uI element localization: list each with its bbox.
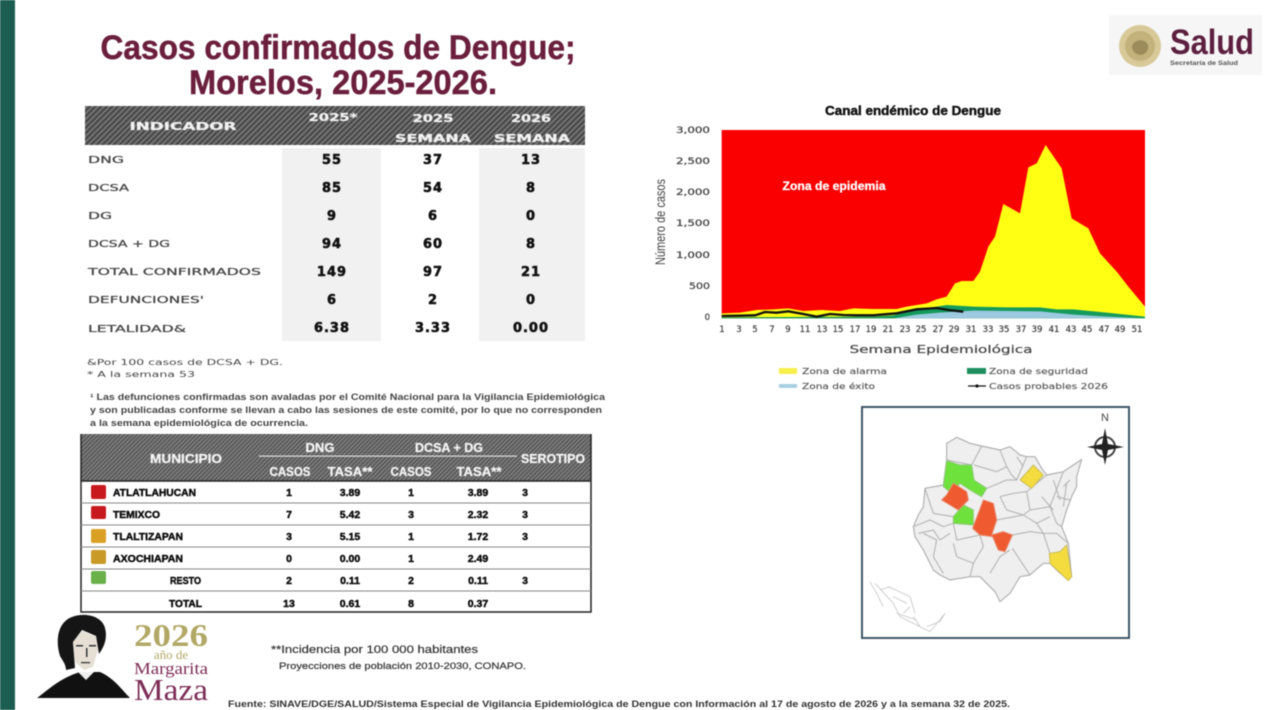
municipality values: 2.49 bbox=[468, 553, 488, 565]
row values: 6 bbox=[428, 209, 438, 224]
y axis title: Número de casos bbox=[652, 179, 668, 265]
row values: 8 bbox=[526, 237, 536, 252]
table header: 2025 bbox=[412, 112, 454, 125]
table frame and row rules bbox=[81, 434, 591, 612]
y axis labels: 3,000 bbox=[676, 126, 710, 136]
commemorative text: 2026 año de Margarita Maza: Maza bbox=[134, 672, 208, 707]
incidence note bbox=[271, 644, 526, 672]
row labels: DNG bbox=[88, 155, 124, 166]
x axis labels: 47 bbox=[1099, 325, 1109, 335]
municipality values: 0.11 bbox=[340, 575, 360, 587]
row values: 21 bbox=[521, 265, 541, 280]
row values: 6 bbox=[327, 293, 337, 308]
chart title: Canal endémico de Dengue bbox=[825, 103, 1001, 118]
source line: Fuente: SINAVE/DGE/SALUD/Sistema Especial de Vigilancia Epidemiológica de Dengue con Información al 17 de agosto de 2026 y a la semana 32 de 2025. bbox=[228, 699, 1010, 709]
zone label: Zona de epidemia bbox=[782, 179, 886, 193]
chart legend bbox=[779, 367, 1108, 391]
chart legend: Zona de seguridad bbox=[989, 367, 1088, 376]
plot areas bbox=[722, 130, 1145, 318]
footnotes for indicator table: * A la semana 53 bbox=[87, 370, 195, 379]
portrait: Margarita Maza bbox=[37, 615, 130, 698]
y axis labels: 2,000 bbox=[676, 188, 710, 198]
x axis labels: 49 bbox=[1115, 325, 1125, 335]
x axis labels: 41 bbox=[1049, 325, 1059, 335]
municipality values: 3.89 bbox=[340, 487, 360, 499]
title bbox=[100, 29, 576, 102]
row values: 6.38 bbox=[314, 321, 350, 336]
note on confirmed deaths: y son publicadas conforme se llevan a cabo las sesiones de este comité, por lo que no corresponden bbox=[90, 405, 602, 415]
x axis labels: 9 bbox=[785, 325, 791, 335]
municipality values: 3 bbox=[522, 509, 528, 521]
left green edge band bbox=[0, 0, 15, 710]
municipality values: 8 bbox=[408, 598, 414, 610]
row values: 94 bbox=[322, 237, 342, 252]
municipal table header bbox=[81, 434, 591, 481]
logo: Salud: Salud bbox=[1170, 23, 1254, 62]
footnotes for indicator table: &Por 100 casos de DCSA + DG. bbox=[87, 358, 283, 367]
commemorative text: 2026 año de Margarita Maza bbox=[134, 617, 208, 707]
row values: 2 bbox=[428, 293, 438, 308]
municipal table header: CASOS bbox=[390, 464, 432, 479]
row labels: DCSA + DG bbox=[88, 239, 170, 250]
municipality values: 0.61 bbox=[340, 598, 360, 610]
x axis labels: 45 bbox=[1082, 325, 1092, 335]
chart: canal endémico bbox=[652, 103, 1145, 391]
row values: 85 bbox=[322, 181, 342, 196]
x axis labels: 13 bbox=[817, 325, 827, 335]
x axis labels: 19 bbox=[866, 325, 876, 335]
logo: Salud: Secretaría de Salud bbox=[1170, 61, 1238, 67]
table: indicadores bbox=[85, 106, 585, 341]
municipality values: 0.37 bbox=[468, 598, 488, 610]
incidence note: Proyecciones de población 2010-2030, CONAPO. bbox=[279, 661, 526, 672]
x axis labels: 43 bbox=[1066, 325, 1076, 335]
municipality values: 3 bbox=[286, 531, 292, 543]
municipality values: 0 bbox=[286, 553, 292, 565]
chart legend: Zona de alarma bbox=[802, 367, 887, 376]
municipality names: TEMIXCO bbox=[113, 509, 160, 521]
municipal table header: DNG bbox=[306, 440, 334, 455]
municipal borders bbox=[913, 446, 1070, 577]
x axis labels: 23 bbox=[900, 325, 910, 335]
municipality values bbox=[283, 487, 528, 610]
municipality values: 3.89 bbox=[468, 487, 488, 499]
green municipalities bbox=[943, 461, 987, 525]
municipality values: 2.32 bbox=[468, 509, 488, 521]
x axis title: Semana Epidemiológica bbox=[850, 343, 1032, 356]
row values: 0 bbox=[526, 209, 536, 224]
note on confirmed deaths: ¹ Las defunciones confirmadas son avaladas por el Comité Nacional para la Vigilancia Epidemiológica bbox=[90, 392, 606, 402]
status icons bbox=[91, 485, 106, 584]
x axis labels: 21 bbox=[883, 325, 893, 335]
table header: 2026 bbox=[511, 112, 551, 125]
commemorative text: 2026 año de Margarita Maza: año de bbox=[154, 647, 188, 662]
municipality values: 7 bbox=[286, 509, 292, 521]
shaded columns bbox=[282, 148, 585, 341]
municipality names: AXOCHIAPAN bbox=[113, 553, 183, 565]
municipality values: 13 bbox=[283, 598, 295, 610]
municipality values: 0.11 bbox=[468, 575, 488, 587]
incidence note: **Incidencia por 100 000 habitantes bbox=[271, 644, 479, 656]
municipality values: 2 bbox=[286, 575, 292, 587]
y axis labels bbox=[676, 126, 710, 323]
x axis labels: 3 bbox=[736, 325, 742, 335]
x axis labels: 37 bbox=[1016, 325, 1026, 335]
row values: 37 bbox=[423, 153, 443, 168]
municipality values: 1 bbox=[408, 553, 414, 565]
title: Morelos, 2025-2026. bbox=[189, 64, 497, 102]
municipality names bbox=[113, 487, 203, 610]
municipality values: 5.42 bbox=[340, 509, 360, 521]
y axis labels: 0 bbox=[705, 313, 710, 323]
municipality names: ATLATLAHUCAN bbox=[113, 487, 196, 499]
row values: 0 bbox=[526, 293, 536, 308]
row labels: DCSA bbox=[88, 183, 129, 194]
row values bbox=[314, 153, 549, 336]
x axis labels: 33 bbox=[983, 325, 993, 335]
x axis labels: 27 bbox=[933, 325, 943, 335]
commemorative text: 2026 año de Margarita Maza: Margarita bbox=[134, 659, 208, 678]
table header: SEMANA bbox=[395, 132, 472, 145]
map frame bbox=[862, 407, 1129, 638]
compass: N bbox=[1101, 412, 1109, 424]
municipality values: 0.00 bbox=[340, 553, 360, 565]
row labels: DG bbox=[88, 211, 112, 222]
municipalities bbox=[870, 437, 1082, 632]
x axis labels: 25 bbox=[916, 325, 926, 335]
municipality values: 2 bbox=[408, 575, 414, 587]
red municipalities bbox=[942, 483, 1012, 552]
row values: 149 bbox=[317, 265, 347, 280]
compass bbox=[1087, 412, 1124, 465]
table header bbox=[85, 106, 585, 145]
table header: 2025* bbox=[308, 111, 358, 124]
yellow municipalities bbox=[1020, 465, 1072, 581]
row labels: LETALIDAD& bbox=[88, 324, 186, 335]
map of Morelos bbox=[862, 407, 1129, 638]
municipal table header: SEROTIPO bbox=[521, 451, 585, 466]
municipal table header: TASA** bbox=[328, 464, 373, 479]
footnotes for indicator table bbox=[87, 358, 283, 379]
y axis labels: 2,500 bbox=[676, 157, 710, 167]
row values: 3.33 bbox=[415, 321, 451, 336]
municipality names: TLALTIZAPAN bbox=[113, 531, 183, 543]
municipality names: RESTO bbox=[170, 575, 201, 587]
row labels bbox=[86, 155, 261, 335]
x axis labels: 29 bbox=[949, 325, 959, 335]
municipality values: 3 bbox=[522, 487, 528, 499]
title: Casos confirmados de Dengue; bbox=[100, 29, 576, 67]
x axis labels: 15 bbox=[833, 325, 843, 335]
municipal table header: CASOS bbox=[270, 464, 311, 479]
municipal table header: TASA** bbox=[456, 464, 502, 479]
table: municipios bbox=[81, 434, 591, 612]
table header: SEMANA bbox=[494, 132, 571, 145]
x axis labels: 31 bbox=[966, 325, 976, 335]
note on confirmed deaths bbox=[90, 392, 606, 428]
municipality values: 3 bbox=[408, 509, 414, 521]
x axis labels: 1 bbox=[719, 325, 725, 335]
x axis labels: 39 bbox=[1032, 325, 1042, 335]
x axis labels: 35 bbox=[999, 325, 1009, 335]
municipality values: 1 bbox=[408, 531, 414, 543]
row values: 54 bbox=[423, 181, 443, 196]
logo: Salud bbox=[1109, 15, 1262, 75]
municipality names: TOTAL bbox=[169, 598, 203, 610]
municipality values: 3 bbox=[522, 575, 528, 587]
y axis labels: 500 bbox=[689, 282, 710, 292]
municipal table header: MUNICIPIO bbox=[150, 451, 222, 466]
commemorative text: 2026 año de Margarita Maza: 2026 bbox=[134, 617, 208, 653]
municipal table header: DCSA + DG bbox=[415, 440, 483, 455]
y axis labels: 1,500 bbox=[676, 219, 710, 229]
row values: 55 bbox=[322, 153, 342, 168]
x axis labels: 7 bbox=[769, 325, 775, 335]
x axis labels: 11 bbox=[800, 325, 810, 335]
municipality values: 5.15 bbox=[340, 531, 360, 543]
inset map of Mexico bbox=[870, 582, 945, 632]
row values: 97 bbox=[423, 265, 443, 280]
x axis labels: 17 bbox=[850, 325, 860, 335]
table header: INDICADOR bbox=[130, 120, 237, 133]
row values: 60 bbox=[423, 237, 443, 252]
municipality values: 1 bbox=[408, 487, 414, 499]
x axis labels bbox=[719, 325, 1142, 335]
municipality values: 3 bbox=[522, 531, 528, 543]
municipality values: 1.72 bbox=[468, 531, 488, 543]
row values: 13 bbox=[521, 153, 541, 168]
row labels: DEFUNCIONES' bbox=[88, 295, 204, 306]
x axis labels: 51 bbox=[1132, 325, 1142, 335]
row values: 8 bbox=[526, 181, 536, 196]
x axis labels: 5 bbox=[752, 325, 758, 335]
chart legend: Casos probables 2026 bbox=[989, 382, 1108, 391]
row values: 0.00 bbox=[513, 321, 549, 336]
row values: 9 bbox=[327, 209, 337, 224]
municipality values: 1 bbox=[286, 487, 292, 499]
state outline bbox=[913, 437, 1082, 602]
y axis labels: 1,000 bbox=[676, 251, 710, 261]
row labels: TOTAL CONFIRMADOS bbox=[86, 267, 261, 278]
note on confirmed deaths: a la semana epidemiológica de ocurrencia. bbox=[90, 418, 308, 428]
chart legend: Zona de éxito bbox=[802, 381, 875, 391]
